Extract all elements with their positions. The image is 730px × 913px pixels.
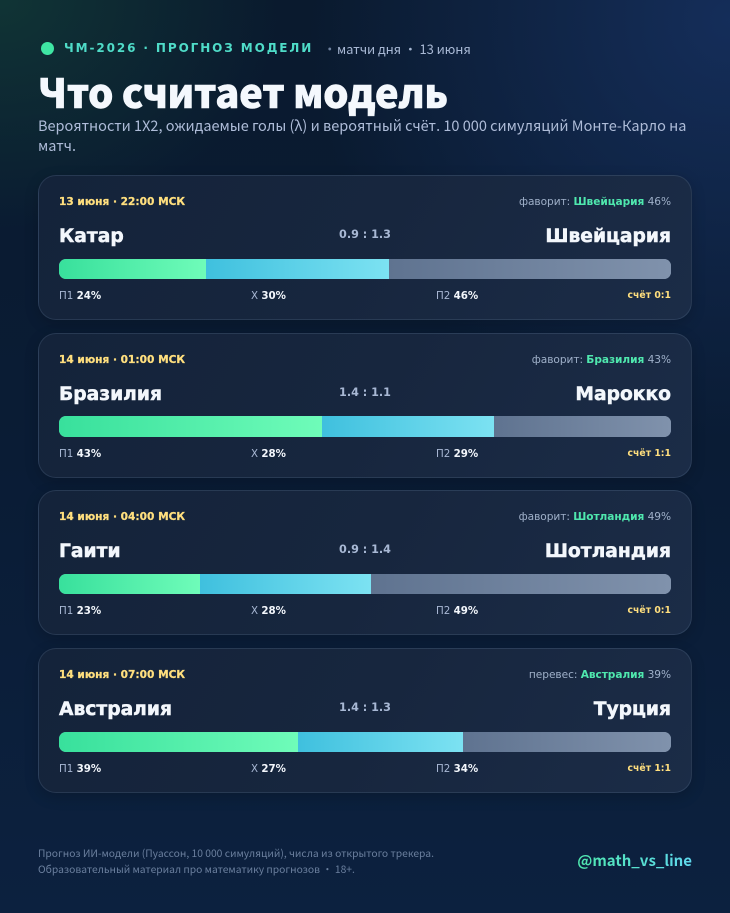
away team: Шотландия	[545, 541, 671, 562]
favourite: фаворит: Шотландия 49%	[519, 511, 671, 523]
match time: 13 июня · 22:00 МСК	[59, 196, 185, 208]
panel: match Гаити — Шотландия	[38, 490, 692, 635]
label: away win: П2 34%	[436, 763, 478, 775]
favourite: перевес: Австралия 39%	[529, 669, 671, 681]
likely score: счёт 1:1	[628, 448, 671, 458]
tag: competition name: ЧМ-2026 · ПРОГНОЗ МОДЕЛИ	[64, 41, 313, 55]
footer disclaimer	[38, 845, 434, 876]
favourite: фаворит: Швейцария 46%	[519, 196, 671, 208]
expected goals: 0.9 : 1.4	[339, 543, 391, 556]
likely score: счёт 0:1	[628, 290, 671, 301]
footer disclaimer: Прогноз ИИ-модели (Пуассон, 10 000 симуляций), числа из открытого трекера.	[38, 845, 434, 860]
icon: green status dot	[41, 42, 54, 55]
label: home win: П1 23%	[59, 605, 101, 617]
label: away win: П2 49%	[436, 605, 478, 617]
panel: match Австралия — Турция	[38, 648, 692, 793]
subtitle: Вероятности 1X2, ожидаемые голы (λ) и вероятный счёт. 10 000 симуляций Монте-Карло на матч.	[38, 115, 686, 156]
label: draw: Х 27%	[251, 763, 286, 775]
likely score: счёт 0:1	[628, 605, 671, 616]
header tag line: матчи дня · 13 июня	[337, 39, 471, 58]
label: draw: Х 28%	[251, 448, 286, 460]
probability bar	[59, 416, 671, 436]
label: draw: Х 28%	[251, 605, 286, 617]
likely score: счёт 1:1	[628, 763, 671, 774]
probability bar	[59, 574, 671, 594]
label: away win: П2 29%	[436, 448, 478, 460]
footer disclaimer: Образовательный материал про математику прогнозов · 18+.	[38, 860, 355, 876]
home team: Катар	[59, 226, 124, 247]
home team: Бразилия	[59, 384, 162, 404]
probability bar	[59, 732, 671, 752]
title: Что считает модель	[38, 62, 448, 120]
expected goals: 1.4 : 1.3	[339, 701, 391, 714]
label: away win: П2 46%	[436, 290, 478, 302]
match time: 14 июня · 04:00 МСК	[59, 511, 185, 523]
away team: Швейцария	[545, 226, 671, 247]
tag: date: •	[323, 38, 336, 58]
away team: Марокко	[575, 384, 671, 404]
match time: 14 июня · 01:00 МСК	[59, 354, 185, 366]
label: home win: П1 24%	[59, 290, 101, 302]
match time: 14 июня · 07:00 МСК	[59, 669, 185, 681]
panel: match Бразилия — Марокко	[38, 332, 692, 478]
expected goals: 0.9 : 1.3	[339, 228, 391, 241]
header tag line	[41, 38, 471, 58]
label: home win: П1 39%	[59, 763, 101, 775]
home team: Гаити	[59, 541, 121, 562]
away team: Турция	[594, 699, 671, 720]
tag: date	[323, 38, 471, 58]
label: draw: Х 30%	[251, 290, 286, 302]
author handle: @math_vs_line	[577, 850, 692, 871]
label: home win: П1 43%	[59, 448, 101, 460]
panel: match Катар — Швейцария	[38, 175, 692, 320]
favourite: фаворит: Бразилия 43%	[532, 354, 671, 366]
home team: Австралия	[59, 699, 172, 720]
probability bar	[59, 258, 671, 279]
expected goals: 1.4 : 1.1	[339, 386, 391, 398]
